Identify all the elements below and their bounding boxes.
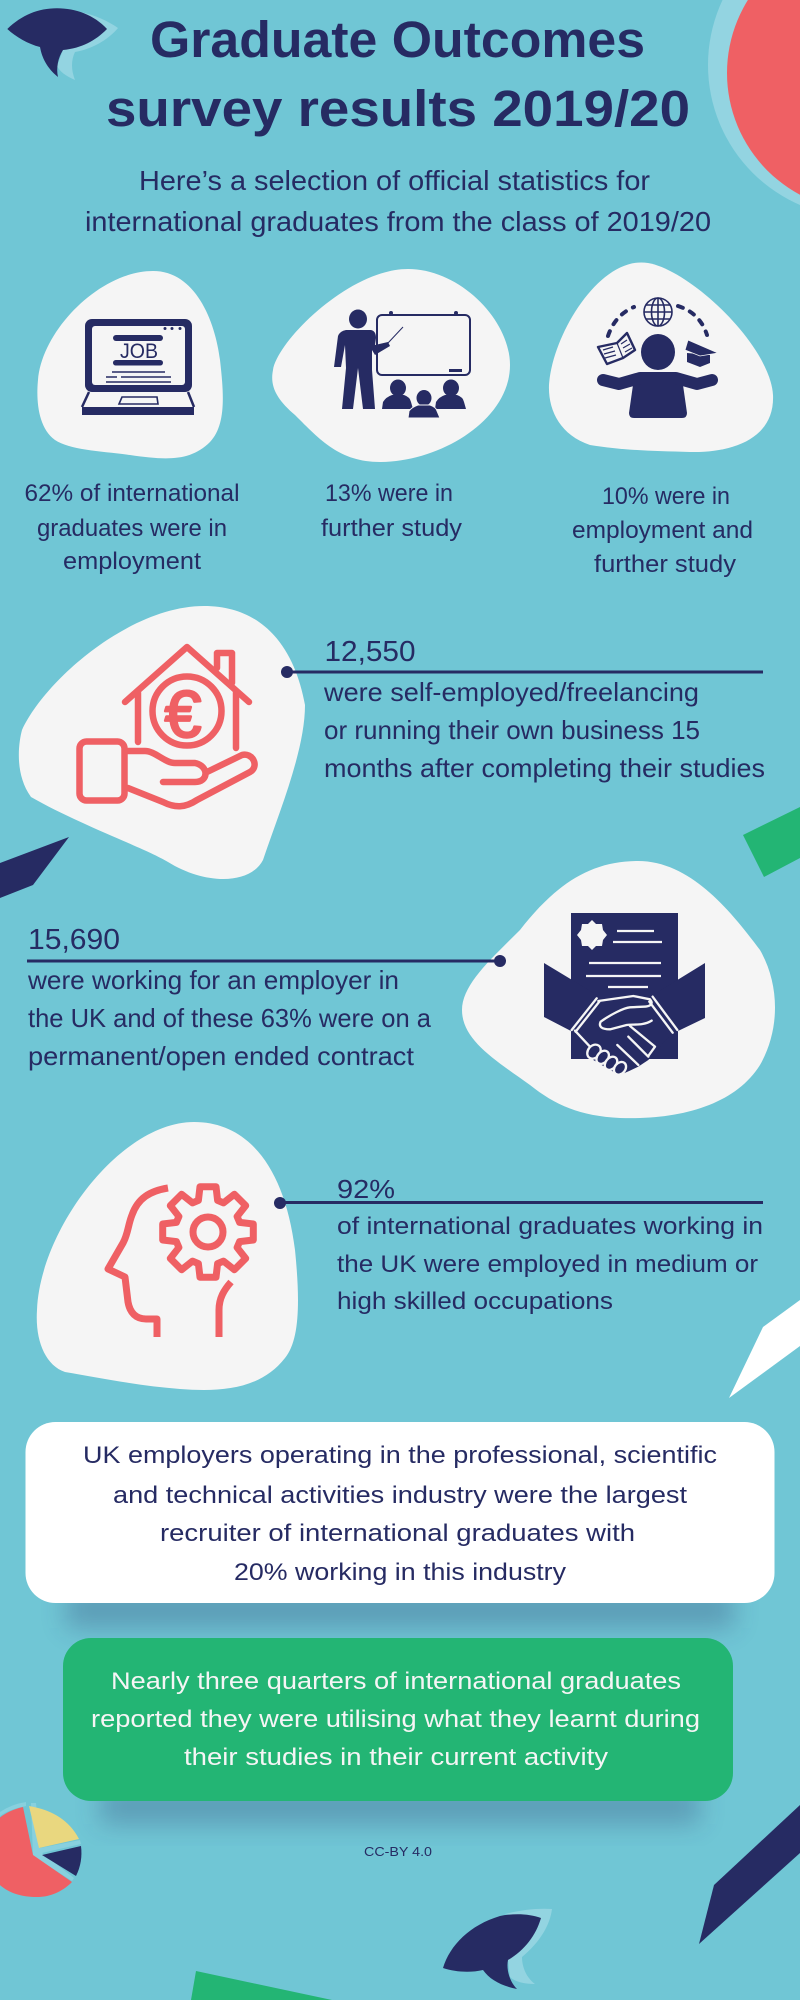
icon: laptop job listing: JOB	[120, 340, 158, 363]
panel: employer contract statistic	[27, 861, 775, 1118]
text: utilising learning: Nearly three quarters of international graduates	[111, 1668, 681, 1695]
connector: self-employed	[281, 666, 763, 678]
label: 10 percent both	[572, 483, 753, 578]
panel: self-employed statistic	[19, 606, 765, 879]
text: largest recruiter: UK employers operating in the professional, scientific	[83, 1442, 717, 1469]
blob: further study	[272, 269, 510, 462]
label: 10 percent both: 10% were in	[602, 483, 730, 510]
figure: 92%: 92%	[337, 1174, 395, 1204]
text: self-employed description: or running their own business 15	[324, 715, 700, 745]
decoration: lower-right navy shard	[699, 1805, 800, 1944]
decoration: left navy shard	[0, 837, 69, 898]
decoration: top-left speech bubble	[7, 8, 118, 80]
shadow: green panel	[100, 1788, 700, 1824]
subtitle: international graduates from the class of 2019/20	[85, 206, 711, 237]
decoration: top-right circle	[708, 0, 800, 218]
text: skilled description	[337, 1213, 763, 1315]
label: 13 percent further study	[321, 480, 462, 542]
text: largest recruiter	[83, 1442, 717, 1586]
decoration: bottom green shard	[191, 1971, 332, 2000]
text: self-employed description: were self-employed/freelancing	[323, 677, 699, 707]
label: 10 percent both: further study	[594, 551, 736, 578]
title	[106, 11, 690, 137]
subtitle	[85, 165, 711, 237]
title: Graduate Outcomes	[150, 11, 645, 68]
icon: head with gear	[108, 1187, 253, 1337]
text: skilled description: high skilled occupations	[337, 1288, 613, 1315]
text: utilising learning: reported they were utilising what they learnt during	[91, 1706, 700, 1733]
text: employer description: were working for an employer in	[27, 965, 399, 995]
text: largest recruiter: and technical activities industry were the largest	[113, 1482, 687, 1509]
shadow: white panel	[66, 1590, 734, 1628]
panel: further study statistic	[272, 269, 510, 542]
decoration: pie chart	[0, 1802, 81, 1897]
text: skilled description: of international graduates working in	[337, 1213, 763, 1240]
text: self-employed description: months after completing their studies	[324, 753, 765, 783]
decoration: right green shard	[743, 807, 800, 877]
card: green panel	[63, 1638, 733, 1801]
label: 13 percent further study: 13% were in	[325, 480, 453, 507]
blob: employer	[462, 861, 775, 1118]
text: employer description	[27, 965, 432, 1071]
blob: employment	[37, 271, 223, 458]
panel: largest recruiter callout	[26, 1422, 774, 1628]
text: skilled description: the UK were employed in medium or	[337, 1251, 758, 1278]
panel: employment and further study statistic	[549, 262, 773, 578]
figure: 15,690: 15,690	[28, 924, 120, 956]
title: survey results 2019/20	[106, 80, 690, 137]
label: 62 percent in employment: 62% of international	[24, 480, 240, 507]
label: 13 percent further study: further study	[321, 515, 462, 542]
icon: hand holding house with euro coin	[80, 647, 255, 806]
connector: skilled	[274, 1197, 763, 1209]
label: 62 percent in employment: employment	[63, 548, 201, 575]
subtitle: Here’s a selection of official statistics for	[139, 165, 650, 196]
label: 62 percent in employment: graduates were in	[37, 515, 227, 542]
text: employer description: the UK and of these 63% were on a	[28, 1003, 432, 1033]
panel: utilising learning callout	[63, 1638, 733, 1824]
decoration: bottom speech bubble	[443, 1909, 552, 1989]
card: white panel	[26, 1422, 774, 1603]
text: utilising learning: their studies in their current activity	[184, 1744, 609, 1771]
icon: contract and handshake	[544, 913, 705, 1077]
licence note: CC-BY 4.0	[364, 1845, 432, 1859]
panel: employment statistic	[24, 271, 240, 575]
blob: skilled	[37, 1122, 298, 1390]
text: utilising learning	[91, 1668, 700, 1771]
text: largest recruiter: 20% working in this industry	[234, 1559, 567, 1586]
label: 62 percent in employment	[24, 480, 240, 575]
text: employer description: permanent/open ended contract	[28, 1041, 415, 1071]
icon: laptop job listing	[82, 319, 194, 415]
panel: skilled occupations statistic	[37, 1122, 763, 1390]
icon: hand holding house with euro coin: €	[165, 677, 201, 751]
blob: self-employed	[19, 606, 305, 879]
text: self-employed description	[323, 677, 765, 783]
label: 10 percent both: employment and	[572, 517, 753, 544]
figure: 12,550: 12,550	[324, 636, 416, 668]
icon: person juggling globe, book and cap	[598, 298, 718, 418]
connector: employer	[27, 955, 506, 967]
decoration: right white shard	[729, 1300, 800, 1398]
icon: teacher at whiteboard with students	[334, 310, 470, 418]
blob: both	[549, 262, 773, 452]
text: largest recruiter: recruiter of international graduates with	[160, 1520, 635, 1547]
